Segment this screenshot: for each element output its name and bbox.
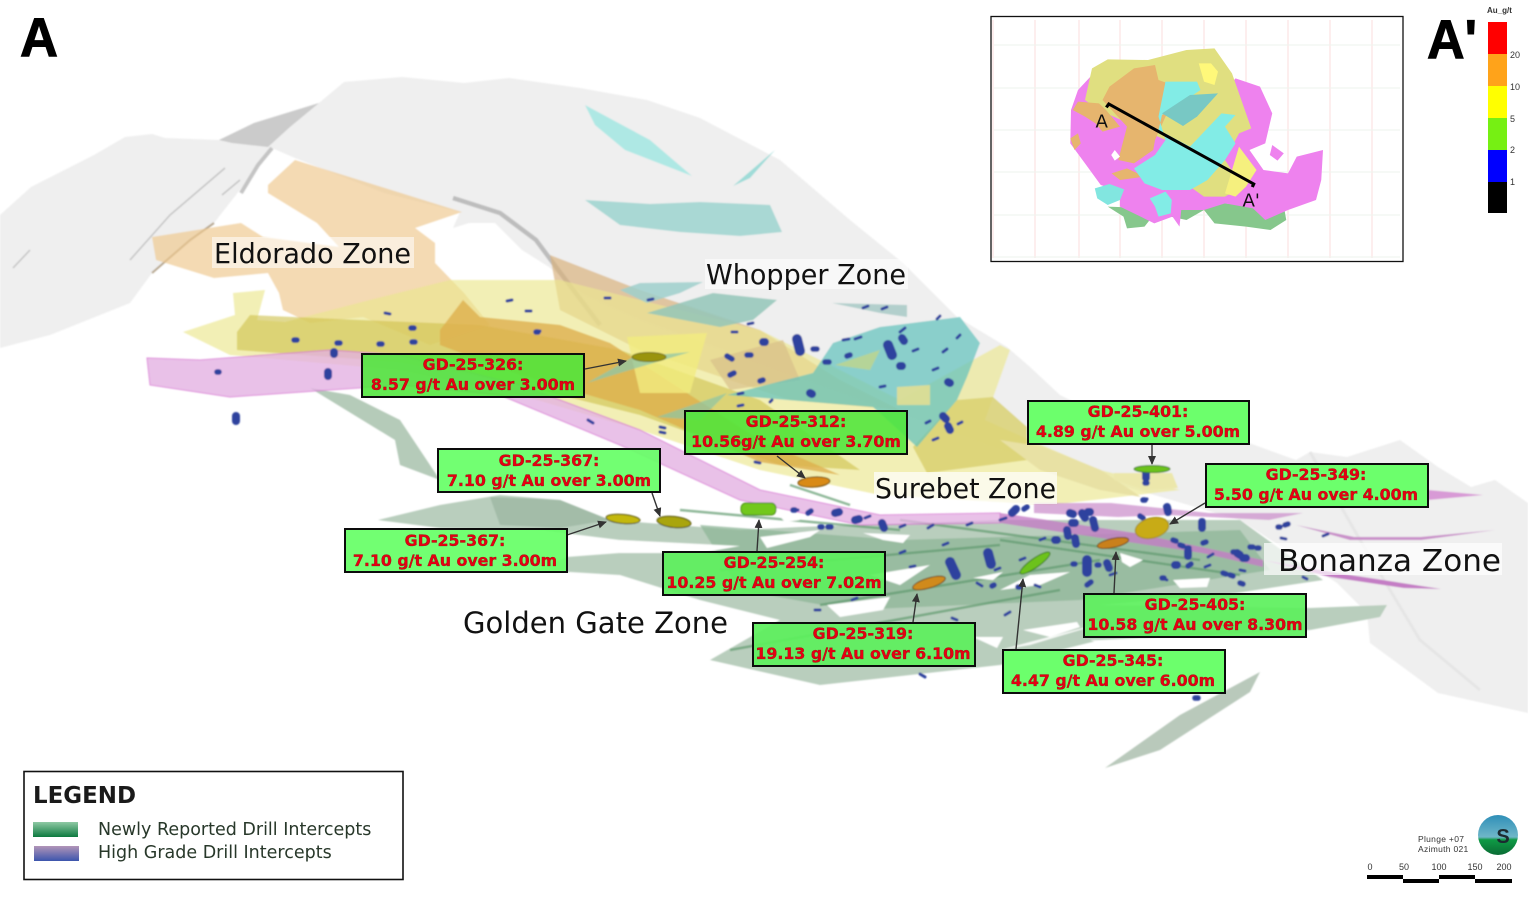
callout: GD-25-405 — [1084, 594, 1306, 637]
callout: GD-25-349 — [1206, 464, 1428, 507]
zone label: Bonanza: Bonanza Zone — [1278, 544, 1501, 579]
callout: GD-25-312: 10.56g/t Au over 3.70m — [691, 432, 901, 451]
green newly reported intercepts — [310, 388, 1387, 768]
zone label: Whopper: Whopper Zone — [706, 258, 906, 291]
grade colour scale: Au_g/t — [1487, 6, 1512, 15]
callout: GD-25-254 — [663, 552, 885, 595]
callout: GD-25-349: 5.50 g/t Au over 4.00m — [1214, 485, 1418, 504]
callout: GD-25-401: GD-25-401: — [1088, 402, 1188, 421]
callout: GD-25-254: GD-25-254: — [724, 553, 824, 572]
leader arrows — [567, 361, 1205, 649]
orientation note: Azimuth 021 — [1418, 844, 1469, 854]
callout: GD-25-349: GD-25-349: — [1266, 465, 1366, 484]
3D geological model — [0, 77, 1528, 768]
orientation note: Plunge +07 — [1418, 834, 1464, 844]
zone label: Eldorado: Eldorado Zone — [214, 237, 411, 270]
callout: GD-25-319 — [753, 623, 975, 666]
scale bar — [1367, 862, 1512, 883]
drill holes — [217, 298, 1328, 698]
callout: GD-25-345 — [1003, 650, 1225, 693]
callout: GD-25-367 upper: GD-25-367: — [499, 451, 599, 470]
callout: GD-25-345: 4.47 g/t Au over 6.00m — [1011, 671, 1215, 690]
orientation note — [1418, 834, 1469, 854]
legend — [24, 772, 403, 880]
icon: company globe: S — [1496, 826, 1510, 848]
orange Eldorado vein — [152, 160, 900, 410]
callout: GD-25-254: 10.25 g/t Au over 7.02m — [666, 573, 882, 592]
callout: GD-25-326: GD-25-326: — [423, 355, 523, 374]
callout: GD-25-401: 4.89 g/t Au over 5.00m — [1036, 422, 1240, 441]
inset section line A to A prime: A — [1096, 113, 1108, 132]
legend item: newly reported: Newly Reported Drill Intercepts — [98, 820, 371, 840]
grade colour scale — [1487, 6, 1520, 213]
legend item: high grade: High Grade Drill Intercepts — [98, 843, 332, 863]
scale bar: 0 — [1367, 862, 1373, 872]
grade colour scale: 2 — [1510, 145, 1515, 155]
callout: GD-25-367 lower — [345, 529, 567, 572]
grade colour scale: 10 — [1510, 82, 1520, 92]
callout: GD-25-367 lower: 7.10 g/t Au over 3.00m — [353, 551, 557, 570]
callout: GD-25-319: GD-25-319: — [813, 624, 913, 643]
callout: GD-25-345: GD-25-345: — [1063, 651, 1163, 670]
yellow vein mass — [183, 280, 1180, 505]
callout: GD-25-312 — [685, 411, 907, 454]
section marker A: A — [20, 6, 58, 68]
callout: GD-25-326 — [362, 354, 584, 397]
callout: GD-25-367 upper — [438, 449, 660, 492]
callout: GD-25-367 upper: 7.10 g/t Au over 3.00m — [447, 471, 651, 490]
callout: GD-25-312: GD-25-312: — [746, 412, 846, 431]
inset plan map — [991, 16, 1403, 262]
zone label: Golden Gate: Golden Gate Zone — [463, 606, 728, 640]
scale bar: 50 — [1399, 862, 1409, 872]
grade colour scale: 20 — [1510, 50, 1520, 60]
callout: GD-25-326: 8.57 g/t Au over 3.00m — [371, 375, 575, 394]
scale bar: 200 — [1496, 862, 1512, 872]
inset section line A to A prime — [1096, 104, 1260, 212]
callout: GD-25-401 — [1028, 401, 1249, 444]
callout: GD-25-319: 19.13 g/t Au over 6.10m — [755, 644, 971, 663]
purple high grade intercepts — [147, 350, 1495, 589]
callout: GD-25-367 lower: GD-25-367: — [405, 531, 505, 550]
legend: LEGEND — [33, 783, 136, 809]
inset geology shapes — [1070, 48, 1323, 230]
grade colour scale: 1 — [1510, 177, 1515, 187]
grade colour scale: 5 — [1510, 114, 1515, 124]
zone label: Surebet: Surebet Zone — [875, 472, 1056, 505]
ore discs — [606, 352, 1171, 593]
scale bar: 100 — [1431, 862, 1447, 872]
grey host shell — [0, 77, 1528, 713]
icon: company globe — [1478, 815, 1518, 855]
section marker A prime: A' — [1427, 8, 1477, 70]
teal central vein — [587, 282, 980, 447]
scale bar: 150 — [1467, 862, 1483, 872]
teal veins upper — [585, 105, 782, 236]
callout: GD-25-405: GD-25-405: — [1145, 595, 1245, 614]
callout: GD-25-405: 10.58 g/t Au over 8.30m — [1087, 615, 1303, 634]
inset section line A to A prime: A' — [1242, 192, 1260, 212]
